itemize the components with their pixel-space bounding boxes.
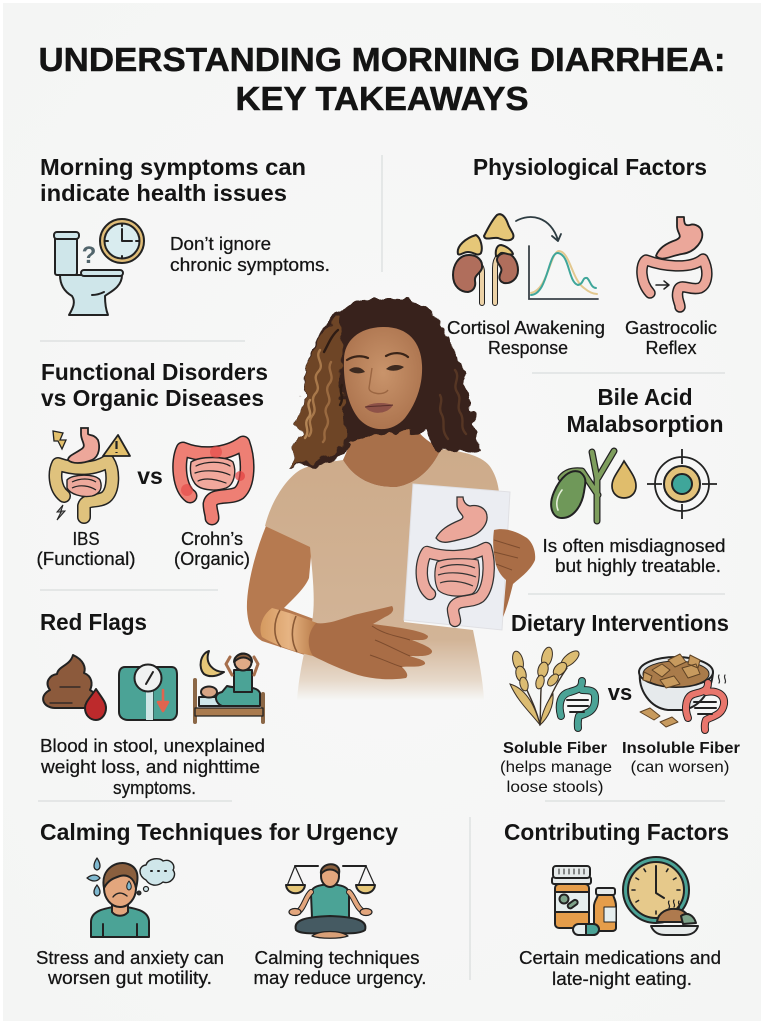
text: gastrocolic reflex (625, 318, 717, 358)
text: calming techniques may reduce urgency (254, 948, 426, 988)
heading: physiological factors: Physiological Factors (473, 154, 707, 180)
panel: contributing factors (504, 819, 729, 989)
icon: gallbladder and ducts (551, 451, 614, 521)
title (38, 41, 726, 117)
icon: stool with blood drop (43, 655, 106, 720)
text: medications and late-night eating: Certain medications and (519, 948, 721, 968)
panel: morning symptoms (40, 154, 330, 315)
heading: morning symptoms: indicate health issues (40, 180, 287, 206)
text: can worsen: (can worsen) (630, 759, 730, 776)
heading: bile acid malabsorption (566, 384, 724, 437)
text: gastrocolic reflex: Gastrocolic (625, 318, 717, 338)
face (344, 327, 422, 429)
heading: functional disorders: vs Organic Diseases (41, 385, 264, 411)
heading: bile acid malabsorption: Malabsorption (566, 411, 724, 437)
text: don't ignore (170, 234, 330, 275)
text: often misdiagnosed: Is often misdiagnosed (542, 536, 726, 556)
icon: meditating man with scales (286, 864, 375, 938)
text: often misdiagnosed (542, 536, 726, 576)
panel: physiological factors (447, 154, 717, 358)
text: IBS: (Functional) (36, 549, 136, 569)
heading: functional disorders: Functional Disorders (41, 359, 268, 385)
text: calming techniques may reduce urgency: Calming techniques (254, 948, 420, 968)
icon: bile drop (612, 461, 636, 498)
text: stress and anxiety: Stress and anxiety can (36, 948, 224, 968)
text: cortisol awakening response: Cortisol Awakening (447, 318, 605, 338)
icon: cereal bowl (639, 654, 713, 727)
text: cortisol awakening response (447, 318, 605, 358)
icon: gastrocolic reflex (642, 217, 707, 307)
text: helps manage (500, 759, 612, 796)
neck (343, 410, 441, 487)
text: gastrocolic reflex: Reflex (646, 338, 696, 358)
heading: morning symptoms (40, 154, 306, 206)
text: often misdiagnosed: but highly treatable. (555, 556, 721, 576)
text: cortisol awakening response: Response (488, 338, 568, 358)
text: stress and anxiety: worsen gut motility. (47, 968, 212, 988)
panel: dietary interventions (500, 610, 740, 796)
illustration: worried woman holding gut diagram (247, 298, 535, 700)
heading: dietary interventions: Dietary Interventions (511, 610, 729, 636)
text: stress and anxiety (36, 948, 224, 988)
icon: weight scale (119, 664, 177, 720)
text: red flags description (40, 736, 265, 798)
right hand (493, 529, 535, 617)
icon: target (647, 449, 717, 519)
chart: cortisol curve (529, 246, 598, 299)
heading: contributing factors: Contributing Factors (504, 819, 729, 845)
heading: morning symptoms: Morning symptoms can (40, 154, 306, 180)
paper with gut diagram (404, 484, 510, 630)
icon: Crohn's gut (180, 443, 247, 518)
icon: red gut (686, 675, 726, 730)
icon: toilet and clock: ? (82, 242, 96, 269)
text: IBS (36, 529, 136, 569)
text: medications and late-night eating (519, 948, 721, 989)
panel: functional disorders vs organic diseases (36, 359, 268, 569)
heading: functional disorders (41, 359, 268, 411)
curls (305, 330, 466, 442)
text: medications and late-night eating: late-night eating. (552, 969, 692, 989)
text: red flags description: weight loss, and nighttime (40, 757, 260, 777)
icon: medication bottles (552, 866, 616, 935)
panel: red flags (40, 609, 265, 798)
icon: IBS gut (53, 428, 130, 520)
icon: clock with plate (623, 857, 698, 935)
text: vs: vs (137, 463, 163, 489)
icon: nighttime symptoms bed (195, 651, 263, 722)
text: don't ignore: Don’t ignore (170, 234, 271, 254)
title: UNDERSTANDING MORNING DIARRHEA: (38, 41, 726, 78)
text: insoluble fiber: Insoluble Fiber (622, 740, 740, 757)
shirt (265, 449, 499, 700)
hand on stomach (309, 606, 432, 679)
text: red flags description: Blood in stool, unexplained (40, 736, 265, 756)
text: helps manage: loose stools) (506, 779, 604, 796)
panel: calming techniques (36, 819, 426, 988)
heading: calming techniques: Calming Techniques for Urgency (40, 819, 398, 845)
text: IBS: IBS (72, 529, 100, 549)
hair (291, 298, 480, 466)
text: don't ignore: chronic symptoms. (170, 255, 330, 275)
gold arm bands (260, 608, 317, 656)
text: Crohn's (174, 529, 250, 569)
title: KEY TAKEAWAYS (236, 80, 528, 117)
icon: stressed man (87, 858, 175, 937)
facial features (347, 353, 408, 413)
icon: adrenal glands and kidneys (453, 214, 518, 303)
icon: wheat stalks (510, 646, 582, 725)
text: soluble fiber: Soluble Fiber (503, 740, 607, 757)
text: helps manage: (helps manage (500, 759, 612, 776)
finger lines (370, 626, 410, 667)
finger lines (494, 540, 520, 570)
text: Crohn's: (Organic) (174, 549, 250, 569)
text: red flags description: symptoms. (113, 778, 196, 798)
icon: toilet and clock (54, 219, 144, 315)
heading: bile acid malabsorption: Bile Acid (598, 384, 692, 410)
panel: bile acid malabsorption (542, 384, 726, 576)
left arm (247, 526, 322, 660)
arrow: adrenal to chart (516, 217, 561, 241)
icon: teal gut (560, 681, 595, 728)
text: calming techniques may reduce urgency: may reduce urgency. (254, 968, 426, 988)
text: Crohn's: Crohn’s (181, 529, 243, 549)
heading: red flags: Red Flags (40, 609, 147, 635)
text: vs: vs (608, 680, 632, 705)
